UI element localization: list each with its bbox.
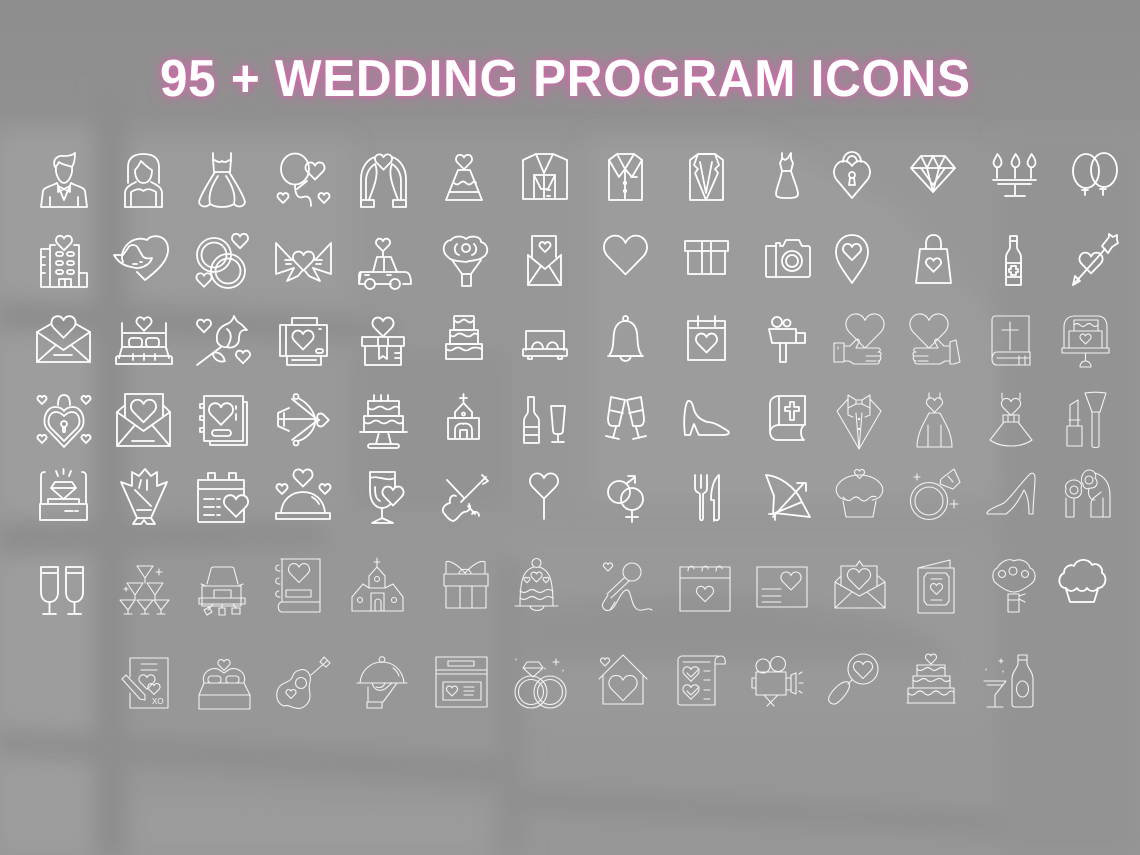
icon: microphone — [602, 563, 652, 610]
icon: heart gown — [446, 155, 482, 200]
icon: cupcake — [1059, 560, 1105, 602]
icon: cine camera — [752, 656, 803, 706]
icon: spiral wedding book — [276, 559, 320, 612]
icon: ball gown — [917, 393, 952, 447]
icon: short dress — [990, 393, 1032, 446]
icon: greeting card — [918, 560, 954, 613]
icon: wine bottle and glass — [524, 397, 565, 443]
icon: high heel — [684, 401, 729, 435]
icon: cupid bow — [278, 394, 329, 446]
icon: flower bundle — [121, 469, 167, 524]
icon: polaroid camera — [280, 318, 327, 365]
icon: side stiletto — [987, 473, 1035, 514]
icon: cloche with hearts — [276, 469, 331, 519]
icon: bell — [608, 316, 643, 361]
icon: padlock with hearts — [37, 395, 91, 447]
icon: double bed — [116, 317, 172, 364]
icon: diamond ring — [910, 469, 960, 520]
icon: little dress — [776, 153, 798, 198]
icon: gift with bow — [444, 561, 488, 608]
icon: champagne flutes — [41, 567, 83, 614]
icon: three tier cake — [907, 654, 955, 703]
icon: big cupcake — [836, 470, 883, 517]
icon: post card — [757, 567, 807, 607]
icon grid — [37, 152, 1118, 709]
icon: just married car — [199, 567, 245, 615]
icon: acoustic guitar — [277, 657, 330, 708]
icon: bed with headboard — [199, 660, 250, 709]
icon: groom — [41, 153, 87, 207]
icon: bible — [770, 396, 805, 440]
icon: gift box — [685, 241, 728, 274]
icon: serving cloche hand — [357, 657, 407, 708]
icon: wedding car — [359, 239, 411, 289]
icon: shirt — [609, 154, 642, 200]
icon: cake under dome stand — [1062, 316, 1109, 367]
icon: candelabra — [993, 154, 1036, 196]
icon: ribbon bow with heart — [276, 243, 331, 281]
icon: tuxedo with bow tie — [837, 395, 881, 449]
icon: wine glass heart — [370, 472, 404, 523]
icon: bride — [125, 154, 162, 207]
icon: hand holding heart left — [910, 314, 960, 364]
icon: twin balloons — [1073, 153, 1117, 195]
icon: bouquet — [444, 236, 487, 286]
icon: heart bell — [515, 558, 558, 610]
icon: round bouquet — [993, 560, 1035, 612]
icon: dove and heart — [114, 236, 168, 280]
icon: heart calendar — [688, 316, 725, 360]
icon: shopping bag — [916, 235, 951, 283]
icon: gender symbols — [608, 476, 643, 522]
icon: balloons — [277, 154, 330, 206]
icon: letter and pen: XO — [152, 697, 164, 706]
icon: checklist scroll — [678, 656, 725, 705]
icon: envelope with heart — [37, 316, 90, 362]
icon: notebook — [200, 396, 247, 445]
icon: tuxedo — [690, 154, 723, 200]
icon: camera — [766, 240, 810, 277]
icon: floral arch — [361, 154, 406, 207]
icon: house with heart — [599, 655, 647, 704]
icon: diamond — [911, 156, 955, 192]
icon: cocktail and bottle — [984, 655, 1033, 707]
icon: guitar — [443, 475, 488, 521]
icon: jacket — [523, 154, 567, 199]
icon: magnifier heart — [829, 654, 878, 704]
icon: rose — [197, 316, 250, 365]
icon: letter and pen — [122, 658, 168, 708]
icon: flower arch — [1066, 470, 1110, 517]
icon: open envelope with heart — [835, 561, 885, 608]
icon: bow and arrow — [766, 475, 810, 520]
icon: gift with heart — [362, 318, 404, 365]
icon: calendar with heart — [198, 473, 248, 522]
icon: invitation envelope — [117, 394, 170, 446]
icon: video camera on stand — [769, 317, 805, 362]
icon: champagne tower — [120, 566, 169, 614]
icon: holy book — [992, 316, 1030, 365]
icon: heart padlock — [834, 152, 870, 198]
icon: bed front view — [523, 331, 567, 359]
icon: champagne bottle — [1006, 236, 1021, 285]
icon: envelope with heart card — [528, 236, 561, 285]
icon: tiered cake — [446, 316, 482, 359]
icon: heart with arrow — [1073, 234, 1118, 285]
title: 95 + WEDDING PROGRAM ICONS — [160, 49, 970, 107]
icon: spiral calendar — [680, 566, 730, 611]
icon: hotel — [41, 236, 87, 287]
icon: heart balloon — [530, 473, 558, 519]
icon: wedding rings — [196, 234, 248, 288]
icon: toasting flutes — [606, 397, 646, 439]
icon: wedding dress — [199, 153, 245, 207]
icon: church — [352, 558, 403, 611]
icon: small chapel — [448, 394, 479, 439]
icon: lipstick and brush — [1067, 392, 1106, 448]
icon: wedding cake on stand — [360, 395, 407, 448]
icon: location pin heart — [836, 235, 868, 283]
icon: ring box — [40, 469, 87, 520]
icon: heart — [604, 236, 647, 274]
icon: invitation window card — [436, 657, 487, 707]
icon: interlocked rings with diamond — [515, 659, 566, 708]
icon: fork and knife — [695, 475, 719, 521]
icon: hand holding heart right — [834, 314, 884, 364]
